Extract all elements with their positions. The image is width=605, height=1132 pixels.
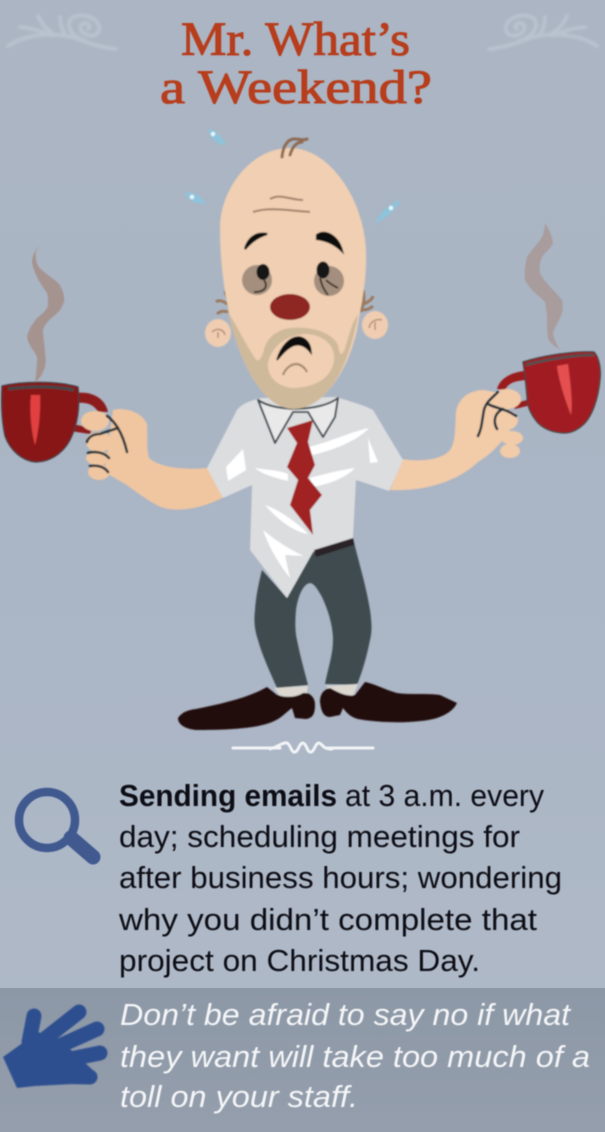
eyebrows xyxy=(245,233,342,251)
advice text: they want will take too much of a xyxy=(120,1039,590,1074)
socks xyxy=(274,684,358,698)
forehead wrinkles xyxy=(253,197,310,212)
flourish under shoes xyxy=(233,743,373,752)
ornament: top right swirl xyxy=(489,15,597,49)
shoe: left xyxy=(178,687,315,730)
body text: project on Christmas Day. xyxy=(119,943,480,978)
head xyxy=(220,148,366,408)
steam: left xyxy=(27,245,64,383)
tie xyxy=(287,420,322,535)
advice text xyxy=(120,997,590,1114)
chin crease xyxy=(283,364,307,375)
trousers xyxy=(254,538,372,688)
ornament: top left swirl xyxy=(8,15,116,49)
advice text: Don’t be afraid to say no if what xyxy=(120,997,571,1032)
shoe: right xyxy=(320,682,457,722)
body text xyxy=(118,778,562,978)
body text: why you didn’t complete that xyxy=(118,902,537,937)
icon: blue hand xyxy=(3,1012,100,1088)
icon: magnifying glass xyxy=(19,792,93,857)
nose xyxy=(270,294,310,320)
sweat drops xyxy=(185,129,401,224)
finger lines: right xyxy=(478,392,516,436)
arm and hand: left xyxy=(81,409,224,510)
arm and hand: right xyxy=(390,389,523,490)
shirt xyxy=(207,397,403,598)
top hair xyxy=(282,139,307,157)
title: a Weekend? xyxy=(160,61,432,114)
belt xyxy=(314,538,354,557)
body text: Sending emails xyxy=(119,778,337,813)
cup: right xyxy=(497,352,600,433)
under-eye lines xyxy=(254,278,338,295)
advice text: toll on your staff. xyxy=(120,1079,358,1114)
body text: day; scheduling meetings for xyxy=(119,819,520,854)
illustration: stressed man xyxy=(2,129,600,730)
title: Mr. What’s xyxy=(181,13,410,66)
panel: advice xyxy=(0,988,605,1132)
advice background xyxy=(0,988,605,1132)
body text: after business hours; wondering xyxy=(119,860,562,895)
eyes xyxy=(256,262,330,280)
side hair xyxy=(216,290,373,314)
collar xyxy=(258,398,338,443)
finger lines: left xyxy=(87,416,127,472)
ears xyxy=(205,311,388,347)
title xyxy=(160,13,432,114)
cup: left xyxy=(2,382,108,462)
body text: at 3 a.m. every xyxy=(345,778,544,813)
eye bags xyxy=(242,265,344,296)
steam: right xyxy=(525,223,563,350)
mouth xyxy=(277,337,311,360)
beard xyxy=(228,312,358,409)
